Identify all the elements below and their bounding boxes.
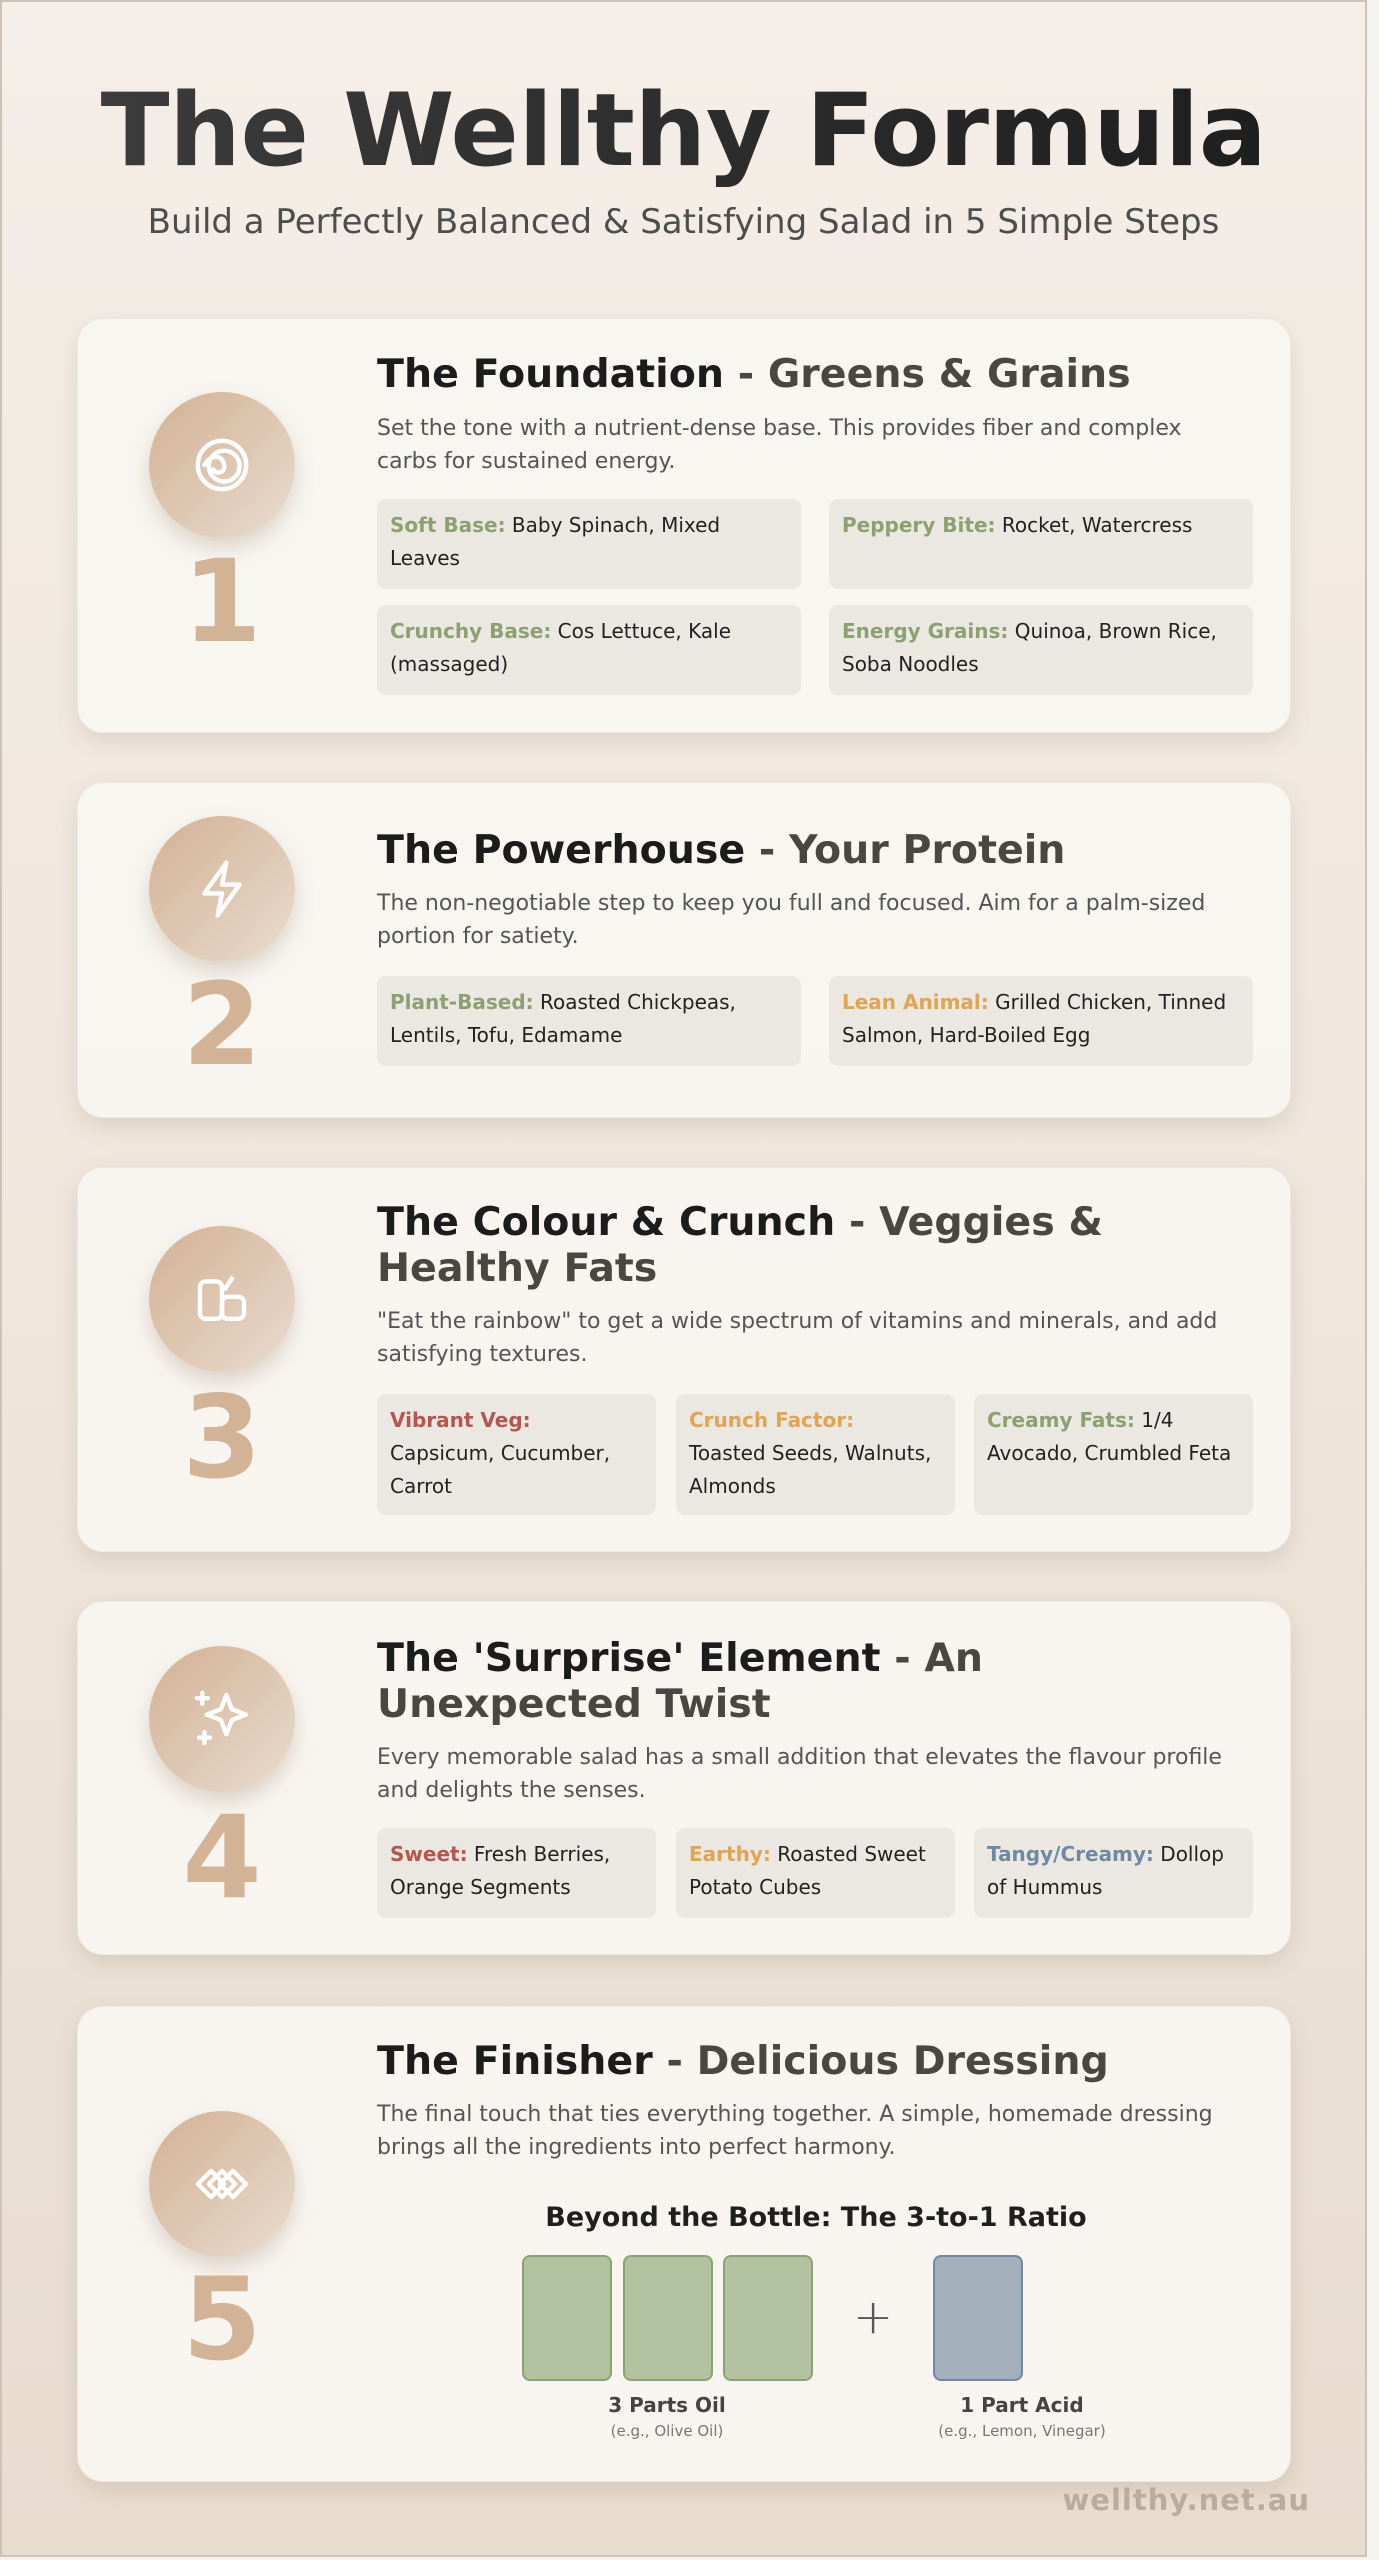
- text 3: "Eat the rainbow" to get a wide spectrum of vitamins and minerals, and add satisfying textures.: [377, 1309, 1217, 1367]
- panel: step 4: [77, 1601, 1291, 1955]
- heading 2: The Powerhouse - Your Protein: [377, 827, 1065, 873]
- chips 3: Crunch Factor:: [689, 1408, 854, 1432]
- footer brand: wellthy.net.au: [1062, 2483, 1310, 2517]
- label acid: [938, 2393, 1106, 2440]
- chips 4: Tangy/Creamy: Dollop of Hummus: [987, 1842, 1224, 1899]
- label oil: (e.g., Olive Oil): [611, 2422, 723, 2440]
- heading 1: The Foundation - Greens & Grains: [377, 351, 1131, 397]
- panel: step 2: [77, 782, 1291, 1118]
- panel: step 3: [77, 1167, 1291, 1552]
- title: The Wellthy Formula: [101, 71, 1266, 189]
- chart title: Beyond the Bottle: The 3-to-1 Ratio: [545, 2202, 1087, 2233]
- label oil: 3 Parts Oil: [608, 2393, 726, 2417]
- chips 2: Lean Animal: Grilled Chicken, Tinned Salmon, Hard-Boiled Egg: [842, 990, 1226, 1047]
- icon: sparkles: [149, 1646, 295, 1792]
- chips 4: Sweet: Fresh Berries, Orange Segments: [390, 1842, 610, 1899]
- chips 2: [377, 976, 1253, 1066]
- text 2: The non-negotiable step to keep you full and focused. Aim for a palm-sized portion for satiety.: [377, 891, 1205, 949]
- icon: plate: [149, 392, 295, 538]
- panel: step 1: [77, 318, 1291, 733]
- label acid: (e.g., Lemon, Vinegar): [938, 2422, 1106, 2440]
- number 5: 5: [182, 2253, 262, 2386]
- number 4: 4: [182, 1791, 262, 1924]
- chips 3: Toasted Seeds, Walnuts, Almonds: [689, 1441, 931, 1498]
- oil bars: [522, 2255, 813, 2381]
- ratio chart: [522, 2202, 1106, 2440]
- label oil: [608, 2393, 726, 2440]
- acid bar: [933, 2255, 1023, 2381]
- chips 1: Energy Grains: Quinoa, Brown Rice, Soba Noodles: [842, 619, 1217, 676]
- panel: step 5: [77, 2006, 1291, 2482]
- subtitle: Build a Perfectly Balanced & Satisfying Salad in 5 Simple Steps: [148, 202, 1219, 242]
- icon: lightning: [149, 816, 295, 962]
- text 5: The final touch that ties everything together. A simple, homemade dressing brings all the ingredients into perfect harmony.: [377, 2102, 1213, 2160]
- heading 3: The Colour & Crunch - Veggies & Healthy Fats: [377, 1199, 1103, 1291]
- heading 5: The Finisher - Delicious Dressing: [377, 2038, 1109, 2084]
- label acid: 1 Part Acid: [960, 2393, 1084, 2417]
- text 4: Every memorable salad has a small addition that elevates the flavour profile and delights the senses.: [377, 1745, 1222, 1803]
- icon: boxes: [149, 1226, 295, 1372]
- number 2: 2: [182, 958, 262, 1091]
- chips 3: Creamy Fats: 1/4 Avocado, Crumbled Feta: [987, 1408, 1231, 1465]
- chips 4: Earthy: Roasted Sweet Potato Cubes: [689, 1842, 926, 1899]
- chips 3: Capsicum, Cucumber, Carrot: [390, 1441, 610, 1498]
- chips 3: Vibrant Veg:: [390, 1408, 531, 1432]
- chips 1: Peppery Bite: Rocket, Watercress: [842, 513, 1192, 537]
- chips 1: [377, 499, 1253, 695]
- chips 3: [377, 1394, 1253, 1515]
- icon: dressing: [149, 2111, 295, 2257]
- number 1: 1: [182, 535, 262, 668]
- chips 4: [377, 1828, 1253, 1918]
- chips 1: Crunchy Base: Cos Lettuce, Kale (massaged): [390, 619, 731, 676]
- number 3: 3: [182, 1371, 262, 1504]
- chips 1: Soft Base: Baby Spinach, Mixed Leaves: [390, 513, 720, 570]
- chips 2: Plant-Based: Roasted Chickpeas, Lentils, Tofu, Edamame: [390, 990, 736, 1047]
- plus sign: +: [853, 2289, 893, 2345]
- heading 4: The 'Surprise' Element - An Unexpected Twist: [377, 1635, 983, 1727]
- text 1: Set the tone with a nutrient-dense base. This provides fiber and complex carbs for sustained energy.: [377, 416, 1182, 474]
